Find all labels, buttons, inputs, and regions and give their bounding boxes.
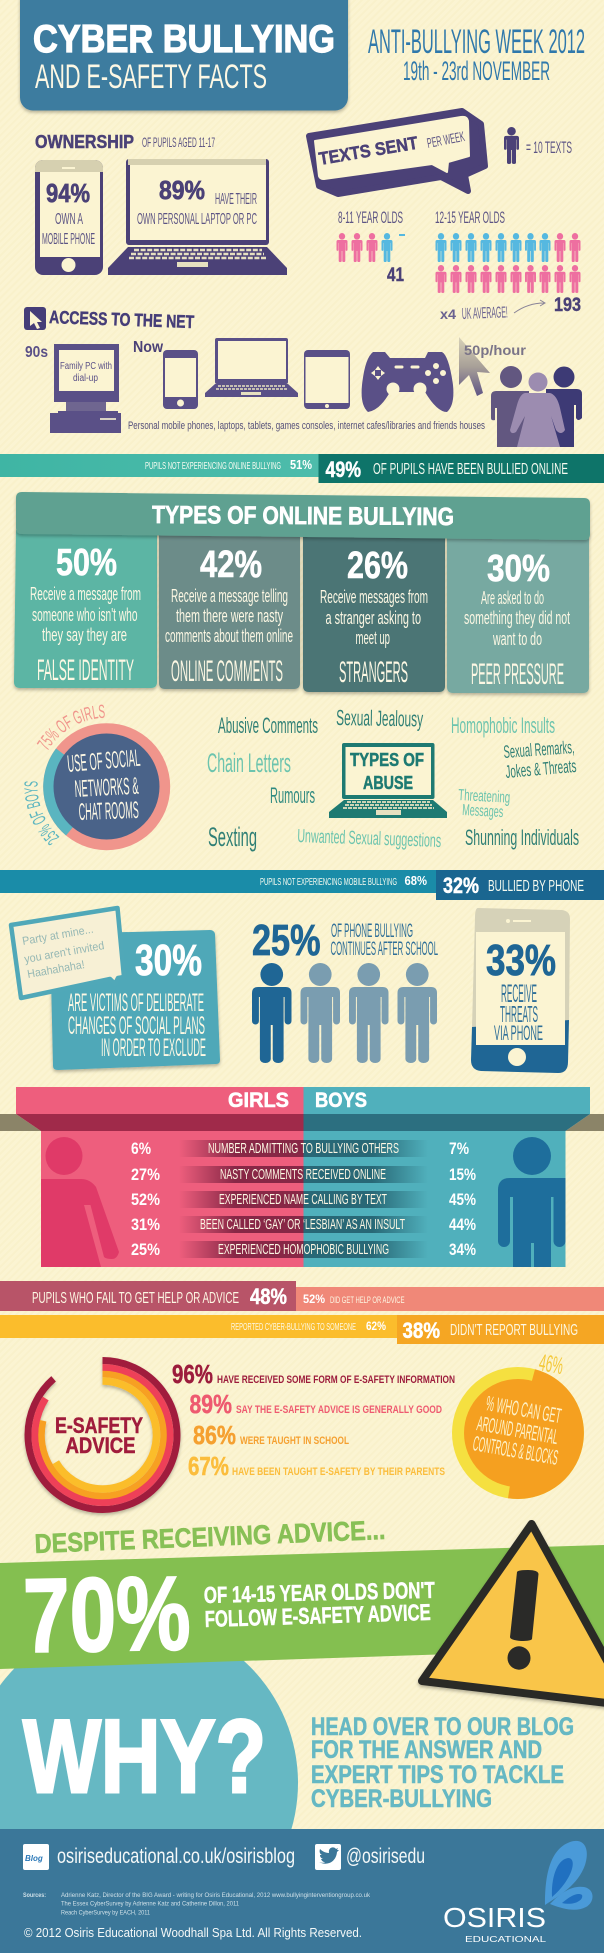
text: CONTINUES AFTER SCHOOL <box>330 939 438 960</box>
girls values: 31% <box>131 1215 160 1234</box>
logo: wordmark <box>443 1902 547 1944</box>
pie caption <box>471 1392 563 1470</box>
icon: mobile phone <box>35 160 103 275</box>
heading: boys: BOYS <box>315 1089 367 1112</box>
stat: 52 percent: 52% <box>303 1292 325 1306</box>
callout: party message: Haahahaha! <box>26 959 86 981</box>
stat row: 96 percent: HAVE RECEIVED SOME FORM OF E-SAFETY INFORMATION <box>217 1374 455 1386</box>
label: 25 percent of boys: 25% OF BOYS <box>24 781 60 846</box>
chart: concentric rings <box>28 1360 177 1510</box>
card: false identity: 50% <box>56 542 117 584</box>
card: false identity: Receive a message from <box>30 584 141 604</box>
panel: texts sent: 12-15 YEAR OLDS <box>435 208 505 227</box>
panel: header title <box>20 0 348 110</box>
icon: blog <box>23 1844 49 1870</box>
icon: phone <box>163 350 198 409</box>
stat: 94 percent: 94% <box>46 178 90 208</box>
row labels <box>200 1140 405 1258</box>
icon: girl <box>41 1137 119 1267</box>
PC caption: dial-up <box>73 373 98 384</box>
callout: party message <box>11 908 124 998</box>
heading: ACCESS TO THE NET <box>49 307 194 332</box>
panel: ownership: OF PUPILS AGED 11-17 <box>142 134 215 150</box>
card: strangers: STRANGERS <box>339 656 408 689</box>
row bands <box>179 1140 428 1258</box>
callout: party message: Party at mine... <box>21 924 94 948</box>
multiplier: x4 <box>440 306 456 322</box>
card: strangers <box>303 530 445 692</box>
chart: parental controls pie <box>452 1349 584 1499</box>
stat row: 86 percent: WERE TAUGHT IN SCHOOL <box>240 1435 349 1447</box>
label: fail to get help: PUPILS WHO FAIL TO GET HELP OR ADVICE <box>32 1290 239 1307</box>
panel: types of online bullying: ONLINE COMMENTS <box>171 655 283 688</box>
stat: 30 percent: 30% <box>135 936 202 985</box>
girls values: 25% <box>131 1240 160 1259</box>
panel: texts sent: UK AVERAGE! <box>462 304 508 323</box>
panel: social exclusion <box>11 908 220 1070</box>
band fold <box>16 1114 304 1131</box>
stat: 70 percent: 70% <box>22 1555 191 1675</box>
card: online comments: them there were nasty <box>176 606 283 626</box>
boys values <box>449 1139 476 1259</box>
panel: threats via phone: VIA PHONE <box>494 1022 543 1045</box>
panel: ownership: HAVE THEIR <box>215 191 257 208</box>
panel: threats via phone: THREATS <box>500 1001 538 1027</box>
banner: help or advice <box>0 1281 604 1311</box>
heading bar <box>16 492 590 540</box>
phone caption <box>42 211 95 248</box>
card: peer pressure: want to do <box>492 629 542 649</box>
sources: Reach CyberSurvey by EACH, 2011 <box>61 1910 150 1916</box>
icon: warning triangle <box>422 1524 604 1706</box>
icon: games controller <box>362 352 453 412</box>
boys values: 34% <box>449 1240 476 1259</box>
icon: tablet <box>304 350 350 409</box>
twitter handle: @osirisedu <box>346 1845 425 1868</box>
abuse words <box>207 705 579 852</box>
panel: girls vs boys <box>0 1087 604 1267</box>
stat: 51 percent: 51% <box>290 457 312 472</box>
phone caption: OWN A <box>55 211 83 228</box>
boys values: 45% <box>449 1190 476 1209</box>
stat: 33 percent: 33% <box>486 936 556 985</box>
girls values: 27% <box>131 1165 160 1184</box>
heading bar: TYPES OF ONLINE BULLYING <box>152 501 454 531</box>
copyright: © 2012 Osiris Educational Woodhall Spa Ltd. All Rights Reserved. <box>24 1926 362 1940</box>
threats caption <box>494 980 543 1045</box>
panel: ownership: OWN PERSONAL LAPTOP OR PC <box>137 211 257 228</box>
sources: Adrienne Katz, Director of the BIG Award - writing for Osiris Educational, 2012 www.bullyinginterventiongroup.co.uk <box>61 1892 371 1899</box>
icon: laptop <box>205 338 298 397</box>
panel: types of online bullying <box>14 492 590 693</box>
title: CYBER BULLYING <box>33 18 335 61</box>
banner text: FOLLOW E-SAFETY ADVICE <box>204 1599 431 1632</box>
pictogram: 8-11 year olds <box>336 233 405 262</box>
icon: blog: Blog <box>25 1854 43 1863</box>
banner: phone bullying <box>0 870 604 900</box>
after school caption <box>330 921 438 960</box>
row labels: BEEN CALLED ‘GAY’ OR ‘LESBIAN’ AS AN INSULT <box>200 1216 405 1233</box>
stat row: 89 percent: SAY THE E-SAFETY ADVICE IS GENERALLY GOOD <box>236 1404 442 1416</box>
label: 46 percent: 46% <box>537 1349 565 1380</box>
bubble heading: TEXTS SENT <box>317 133 419 169</box>
heading: despite receiving advice: DESPITE RECEIVING ADVICE... <box>34 1515 386 1559</box>
panel: types of abuse word cloud <box>207 705 579 852</box>
ring title: ADVICE <box>66 1433 136 1458</box>
label: 90s: 90s <box>25 344 48 361</box>
abuse words: Sexting <box>208 822 257 852</box>
row labels: EXPERIENCED NAME CALLING BY TEXT <box>219 1191 387 1208</box>
ring title: E-SAFETY <box>55 1413 143 1438</box>
subtitle: AND E-SAFETY FACTS <box>35 58 267 96</box>
panel: threats via phone <box>471 908 570 1073</box>
banner text <box>204 1577 435 1632</box>
after school caption: OF PHONE BULLYING <box>331 921 413 942</box>
girls values <box>131 1139 160 1259</box>
laptop caption <box>137 191 257 228</box>
call to action: CYBER-BULLYING <box>311 1785 492 1813</box>
stat: 48 percent: 48% <box>250 1284 287 1309</box>
panel: e-safety advice <box>28 1359 455 1510</box>
card: strangers: a stranger asking to <box>326 608 421 628</box>
card: online comments <box>159 530 300 689</box>
stat: 25 percent: 25% <box>252 916 320 965</box>
heading: ABUSE <box>363 773 413 793</box>
label: 75 percent of girls: 75% OF GIRLS <box>36 704 105 750</box>
logo: wordmark: EDUCATIONAL <box>465 1935 547 1944</box>
pictogram: 12-15 year olds, bottom row <box>436 265 580 293</box>
boys values: 44% <box>449 1215 476 1234</box>
icon: phone <box>471 908 570 1073</box>
heading: TYPES OF <box>350 750 424 770</box>
panel: ownership: MOBILE PHONE <box>42 231 95 248</box>
card: false identity: FALSE IDENTITY <box>37 654 134 687</box>
heading: why: WHY? <box>23 1699 266 1815</box>
label: now: Now <box>133 339 163 356</box>
heading: girls: GIRLS <box>228 1089 289 1112</box>
banner: 70 percent <box>0 1545 604 1675</box>
panel: access to the net <box>24 307 582 447</box>
ring label <box>66 745 141 826</box>
chart: social networks usage ring: USE OF SOCIAL <box>66 745 141 778</box>
callout: party message: you aren't invited <box>23 940 105 966</box>
stat: 32 percent: 32% <box>443 873 479 898</box>
chart: social networks usage ring: NETWORKS & <box>74 773 139 803</box>
ring title <box>55 1413 143 1458</box>
stat: 41: 41 <box>387 265 404 286</box>
text: CHANGES OF SOCIAL PLANS <box>68 1012 205 1040</box>
banner: online bullying <box>0 454 604 483</box>
sources <box>23 1892 371 1916</box>
card: peer pressure <box>447 530 589 693</box>
card: online comments: 42% <box>200 544 262 586</box>
abuse words: Threatening <box>458 787 511 807</box>
chart: social networks usage ring <box>24 704 170 850</box>
text: IN ORDER TO EXCLUDE <box>101 1034 206 1062</box>
abuse words: Rumours <box>270 783 315 808</box>
stat row: 89 percent: 89% <box>190 1389 232 1419</box>
PC caption: Family PC with <box>60 361 112 372</box>
girls values: 6% <box>131 1139 151 1158</box>
stat: 68 percent: 68% <box>404 873 427 888</box>
heading: OWNERSHIP <box>35 132 134 152</box>
row labels: EXPERIENCED HOMOPHOBIC BULLYING <box>218 1241 389 1258</box>
icon: family PC <box>50 344 121 433</box>
card: strangers: 26% <box>347 545 408 587</box>
icon: laptop <box>108 159 287 275</box>
stat row: 96 percent: 96% <box>172 1359 213 1389</box>
stat: 38 percent: 38% <box>402 1318 440 1343</box>
panel: after school <box>252 916 438 1063</box>
card: peer pressure: 30% <box>487 548 550 590</box>
stat row: 96 percent <box>172 1359 455 1389</box>
ring segment: boys <box>43 748 107 836</box>
card: peer pressure: Are asked to do <box>481 588 544 608</box>
banner text: OF 14-15 YEAR OLDS DON'T <box>204 1577 435 1608</box>
chart: social networks usage ring: CHAT ROOMS <box>78 797 139 826</box>
banner: reporting <box>0 1315 604 1344</box>
card: strangers: Receive messages from <box>320 587 428 607</box>
card: false identity <box>14 530 157 688</box>
card: online comments: comments about them online <box>165 626 293 646</box>
sources: The Essex CyberSurvey by Adrienne Katz and Catherine Dillon, 2011 <box>61 1900 239 1908</box>
table body <box>41 1131 304 1267</box>
stat row: 89 percent <box>190 1389 442 1419</box>
boys values: 7% <box>449 1139 469 1158</box>
bubble subheading: PER WEEK <box>426 128 466 151</box>
PC caption <box>60 361 112 384</box>
text: ARE VICTIMS OF DELIBERATE <box>68 989 204 1017</box>
stat: 89 percent: 89% <box>159 175 205 205</box>
blog url: osiriseducational.co.uk/osirisblog <box>57 1845 295 1868</box>
bubble inner <box>315 117 469 179</box>
icon: cursor badge <box>24 307 46 330</box>
label: reported to someone: REPORTED CYBER-BULLYING TO SOMEONE <box>231 1322 356 1333</box>
speech bubble <box>309 111 485 194</box>
panel: texts sent <box>309 111 581 323</box>
arrow <box>514 300 545 313</box>
top band <box>16 1087 304 1114</box>
icon: boy <box>498 1137 566 1267</box>
label: did get help: DID GET HELP OR ADVICE <box>330 1295 404 1305</box>
stat row: 67 percent <box>188 1451 445 1481</box>
panel: ownership <box>35 132 287 275</box>
stat row: 67 percent: 67% <box>188 1451 229 1481</box>
logo: butterfly <box>545 1841 593 1910</box>
abuse words: Sexual Jealousy <box>336 705 423 732</box>
event heading <box>368 23 585 86</box>
icon: laptop <box>329 743 447 818</box>
call to action <box>311 1713 574 1813</box>
stat: 49 percent: 49% <box>326 457 361 482</box>
call to action: FOR THE ANSWER AND <box>311 1736 542 1764</box>
boys values: 15% <box>449 1165 476 1184</box>
stat: 62 percent: 62% <box>366 1319 386 1333</box>
panel: footer <box>0 1829 604 1953</box>
label: pupils not experiencing online bullying: PUPILS NOT EXPERIENCING ONLINE BULLYING <box>145 461 281 472</box>
abuse words: Messages <box>462 802 504 821</box>
row labels: NUMBER ADMITTING TO BULLYING OTHERS <box>208 1140 399 1157</box>
abuse words: Unwanted Sexual suggestions <box>297 826 442 852</box>
card: false identity: they say they are <box>42 625 127 645</box>
stat row: 86 percent <box>193 1420 349 1450</box>
icon: friends group <box>491 366 582 447</box>
icon: large cursor <box>459 337 490 396</box>
pictogram: 12-15 year olds, top row <box>436 233 580 262</box>
stat row: 86 percent: 86% <box>193 1420 236 1450</box>
sources: Sources: <box>23 1892 46 1899</box>
abuse words: Chain Letters <box>207 748 291 778</box>
card: strangers: meet up <box>356 628 390 648</box>
label: price per hour: 50p/hour <box>464 342 527 358</box>
icon: person legend <box>504 127 519 164</box>
girls values: 52% <box>131 1190 160 1209</box>
logo: wordmark: OSIRIS <box>443 1902 546 1933</box>
exclusion caption <box>68 989 206 1062</box>
label: pupils not experiencing mobile bullying: PUPILS NOT EXPERIENCING MOBILE BULLYING <box>260 877 397 888</box>
side shadow <box>0 1114 604 1131</box>
icon: twitter <box>315 1844 341 1870</box>
card: false identity: someone who isn't who <box>32 605 138 625</box>
row labels: NASTY COMMENTS RECEIVED ONLINE <box>220 1166 386 1183</box>
abuse words: Abusive Comments <box>218 713 318 738</box>
stat row: 67 percent: HAVE BEEN TAUGHT E-SAFETY BY THEIR PARENTS <box>232 1466 445 1478</box>
pictogram: one in four <box>252 963 437 1063</box>
why circle <box>0 1618 298 1948</box>
age labels: 8-11 YEAR OLDS <box>338 208 403 227</box>
heading <box>350 750 424 793</box>
card: online comments: Receive a message telling <box>171 586 288 606</box>
stat: 193: 193 <box>554 295 581 316</box>
